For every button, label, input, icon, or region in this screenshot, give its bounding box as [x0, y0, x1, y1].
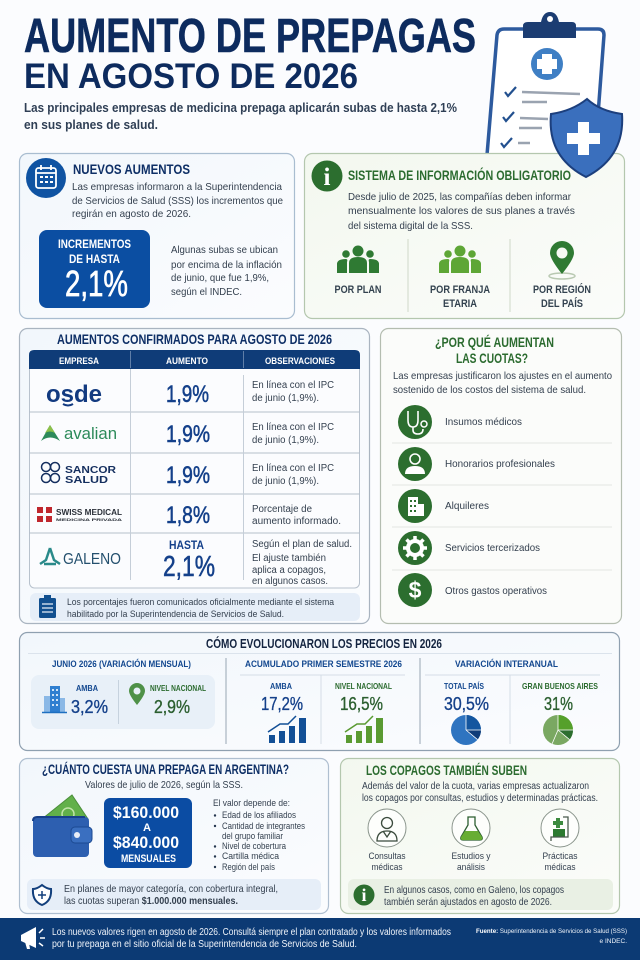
column: interanual: GRAN BUENOS AIRES — [522, 681, 598, 691]
list: factores — [213, 798, 305, 872]
callout: 2,1%: DE HASTA — [69, 252, 120, 266]
heading: LAS CUOTAS? — [456, 350, 528, 366]
item: insumos — [398, 405, 522, 439]
item: consultas: médicas — [372, 862, 403, 873]
note — [252, 380, 334, 404]
item: prácticas — [541, 809, 579, 873]
logo: swiss medical: MEDICINA PRIVADA — [56, 518, 123, 522]
callout: 2,1%: 2,1% — [65, 263, 128, 304]
value: 2,1% — [163, 551, 215, 583]
callout: precio: $160.000 — [113, 803, 179, 822]
callout: 2,1%: INCREMENTOS — [58, 237, 131, 251]
text block: los copagos por consultas, estudios y determinadas prácticas. — [362, 793, 598, 804]
heading: ¿POR QUÉ AUMENTAN — [435, 334, 554, 350]
title: AUMENTO DE PREPAGAS — [24, 10, 476, 63]
icon: info note: i — [361, 885, 367, 905]
item: estudios — [452, 809, 491, 873]
value — [163, 538, 215, 583]
note bar — [348, 879, 613, 910]
text block: de junio, que fue 1,9%, — [171, 272, 269, 284]
icon: blue bars — [268, 716, 306, 743]
heading: CÓMO EVOLUCIONARON LOS PRECIOS EN 2026 — [206, 636, 442, 651]
logo: galeno — [40, 548, 121, 568]
item: servicios: Servicios tercerizados — [445, 542, 540, 554]
icon: building — [42, 686, 67, 712]
value: HASTA — [169, 538, 204, 552]
list: factores: Nivel de cobertura — [222, 841, 286, 851]
icon: people plan — [337, 246, 379, 273]
text block — [393, 370, 612, 396]
item: estudios: análisis — [457, 862, 485, 873]
note: de junio (1,9%). — [252, 476, 319, 487]
column: acumulado: 17,2% — [261, 694, 303, 714]
icon: people age — [439, 246, 481, 273]
label: DEL PAÍS — [541, 297, 583, 310]
text block — [348, 191, 575, 232]
item: servicios — [398, 531, 540, 565]
note bar: las cuotas superan $1.000.000 mensuales. — [64, 895, 238, 907]
label — [533, 283, 591, 310]
heading: SISTEMA DE INFORMACIÓN OBLIGATORIO — [348, 166, 571, 183]
note — [252, 504, 341, 527]
column: acumulado: AMBA — [270, 681, 292, 691]
note — [252, 463, 334, 487]
item: otros gastos: $ — [409, 577, 422, 603]
label: POR PLAN — [334, 284, 382, 296]
callout: precio: A — [143, 822, 151, 834]
title — [24, 10, 476, 96]
column: acumulado: 16,5% — [340, 694, 383, 714]
text block: regirán en agosto de 2026. — [72, 208, 191, 220]
column: junio — [31, 658, 215, 729]
note: Según el plan de salud. — [252, 539, 352, 550]
icon: info: i — [324, 164, 331, 191]
logo: swiss medical: SWISS MEDICAL — [56, 507, 122, 517]
panel: sistema de información — [304, 154, 624, 318]
heading: NUEVOS AUMENTOS — [73, 161, 190, 177]
column: interanual: 30,5% — [444, 694, 489, 714]
text block: Las empresas informaron a la Superintendencia — [72, 181, 282, 193]
logo: swiss medical — [37, 507, 123, 522]
logo: sancor salud: SANCOR — [65, 464, 116, 476]
table header: OBSERVACIONES — [265, 356, 335, 367]
note: En línea con el IPC — [252, 380, 334, 391]
column: junio: AMBA — [76, 683, 98, 693]
heading: ¿CUÁNTO CUESTA UNA PREPAGA EN ARGENTINA? — [42, 761, 289, 777]
heading: LOS COPAGOS TAMBIÉN SUBEN — [366, 762, 527, 778]
callout: precio: $840.000 — [113, 833, 179, 852]
table header: AUMENTO — [166, 356, 208, 367]
value: 1,9% — [166, 462, 210, 489]
note bar — [27, 879, 321, 910]
footer text — [52, 927, 451, 950]
list: factores: Cartilla médica — [222, 851, 279, 861]
icon: wallet — [33, 795, 92, 857]
note: de junio (1,9%). — [252, 435, 319, 446]
note: aumento informado. — [252, 516, 341, 527]
item: prácticas: Prácticas — [542, 851, 578, 862]
title: EN AGOSTO DE 2026 — [24, 57, 358, 96]
table — [29, 350, 360, 588]
label — [430, 284, 490, 310]
logo: avalian — [41, 424, 117, 443]
panel: nuevos aumentos — [20, 154, 294, 318]
icon: calendar — [26, 158, 66, 198]
panel: evolución de precios — [20, 632, 620, 750]
text block: Desde julio de 2025, las compañías deben informar — [348, 191, 571, 203]
column: acumulado — [245, 659, 402, 743]
value: 1,9% — [166, 421, 210, 448]
column: acumulado: NIVEL NACIONAL — [335, 681, 392, 691]
subtitle: Las principales empresas de medicina prepaga aplicarán subas de hasta 2,1% — [24, 101, 457, 115]
list: factores: del grupo familiar — [222, 831, 283, 841]
logo: avalian: avalian — [64, 424, 117, 443]
icon: shield note — [33, 885, 51, 905]
text block — [171, 244, 282, 298]
icon: info note — [354, 884, 374, 906]
icon: pin — [129, 683, 145, 705]
item: consultas — [368, 809, 406, 873]
list: factores: Cantidad de integrantes — [222, 821, 305, 831]
label: POR REGIÓN — [533, 283, 591, 296]
logo: galeno: GALENO — [63, 551, 121, 568]
note bar: En planes de mayor categoría, con cobertura integral, — [64, 883, 278, 895]
note: En línea con el IPC — [252, 463, 334, 474]
column: junio: 2,9% — [154, 697, 190, 717]
note — [252, 422, 334, 446]
note: En línea con el IPC — [252, 422, 334, 433]
column: acumulado: ACUMULADO PRIMER SEMESTRE 2026 — [245, 659, 402, 670]
icon: clipboard note — [39, 595, 56, 618]
pie: gran buenos aires — [543, 715, 573, 745]
text block: de Servicios de Salud (SSS) los incrementos que — [72, 195, 283, 207]
logo: sancor salud: SALUD — [65, 474, 108, 486]
text block — [362, 781, 598, 804]
column: interanual: 31% — [544, 694, 573, 714]
text block: según el INDEC. — [171, 286, 242, 298]
item: honorarios: Honorarios profesionales — [445, 458, 555, 470]
heading — [435, 334, 554, 366]
subtitle — [24, 101, 457, 132]
column: interanual — [444, 658, 598, 745]
icon: green bars — [345, 716, 383, 743]
panel: copagos — [340, 758, 620, 914]
footer — [0, 918, 640, 960]
value: 1,9% — [166, 381, 209, 408]
footer text: Los nuevos valores rigen en agosto de 2026. Consultá siempre el plan contratado y los valores informados — [52, 927, 451, 938]
item: insumos: Insumos médicos — [445, 416, 522, 428]
item: otros gastos — [398, 573, 547, 607]
note bar — [30, 593, 360, 621]
icon: megaphone — [21, 927, 45, 949]
note: El ajuste también — [252, 553, 326, 564]
column: interanual: VARIACIÓN INTERANUAL — [455, 658, 558, 670]
column: junio: JUNIO 2026 (VARIACIÓN MENSUAL) — [52, 658, 191, 670]
text block: Algunas subas se ubican — [171, 244, 278, 256]
subtitle: en sus planes de salud. — [24, 118, 158, 132]
table header: EMPRESA — [59, 356, 99, 367]
text block: por encima de la inflación — [171, 259, 282, 271]
callout: precio — [104, 798, 192, 868]
heading: AUMENTOS CONFIRMADOS PARA AGOSTO DE 2026 — [57, 331, 332, 347]
note bar: En algunos casos, como en Galeno, los copagos — [384, 884, 564, 896]
item: alquileres — [398, 489, 489, 523]
icon: shield — [551, 99, 622, 177]
icon: map pin — [549, 241, 575, 279]
text block: Las empresas justificaron los ajustes en el aumento — [393, 370, 612, 382]
item: estudios: Estudios y — [452, 851, 491, 862]
source: Fuente: Superintendencia de Servicios de Salud (SSS) — [476, 928, 627, 935]
note: de junio (1,9%). — [252, 393, 319, 404]
subheading: Valores de julio de 2026, según la SSS. — [85, 779, 243, 791]
item: otros gastos: Otros gastos operativos — [445, 585, 547, 597]
column: junio: NIVEL NACIONAL — [150, 683, 206, 693]
logo: osde: osde — [46, 381, 102, 408]
text block: del sistema digital de la SSS. — [348, 220, 473, 232]
note bar: también serán ajustados en agosto de 2026. — [384, 896, 552, 908]
list: factores: Región del país — [222, 862, 275, 872]
column: interanual: TOTAL PAÍS — [444, 681, 484, 691]
note — [252, 539, 352, 587]
note bar: Los porcentajes fueron comunicados oficialmente mediante el sistema — [67, 597, 335, 608]
item: honorarios — [398, 447, 555, 481]
item: consultas: Consultas — [368, 851, 406, 862]
note bar: habilitado por la Superintendencia de Servicios de Salud. — [67, 609, 284, 620]
panel: tabla aumentos — [20, 328, 370, 624]
panel: cuánto cuesta — [20, 758, 328, 914]
table header — [29, 350, 360, 369]
text block: Además del valor de la cuota, varias empresas actualizaron — [362, 781, 589, 792]
list: factores: Edad de los afiliados — [222, 810, 296, 820]
source — [476, 928, 627, 945]
icon: info — [312, 160, 342, 192]
note: Porcentaje de — [252, 504, 312, 515]
text block — [72, 181, 283, 220]
column: junio: 3,2% — [71, 697, 108, 717]
callout: 2,1% — [39, 230, 150, 308]
footer text: por tu prepaga en el sitio oficial de la Superintendencia de Servicios de Salud. — [52, 939, 357, 950]
panel: por qué aumentan — [380, 328, 622, 624]
value: 1,8% — [166, 502, 210, 529]
note: aplica a copagos, — [252, 565, 326, 576]
item: prácticas: médicas — [544, 862, 576, 873]
callout: precio: MENSUALES — [121, 853, 176, 865]
icon: clipboard — [487, 12, 604, 155]
note: en algunos casos. — [252, 576, 328, 587]
item: alquileres: Alquileres — [445, 500, 489, 512]
label: ETARIA — [443, 298, 477, 310]
list: factores: El valor depende de: — [213, 798, 290, 808]
logo: sancor salud — [42, 462, 116, 486]
source: e INDEC. — [600, 938, 627, 945]
pie: total país — [451, 715, 481, 745]
text block: sostenido de los costos del sistema de salud. — [393, 384, 586, 396]
label: POR FRANJA — [430, 284, 490, 296]
text block: mensualmente los valores de sus planes a través — [348, 205, 575, 217]
